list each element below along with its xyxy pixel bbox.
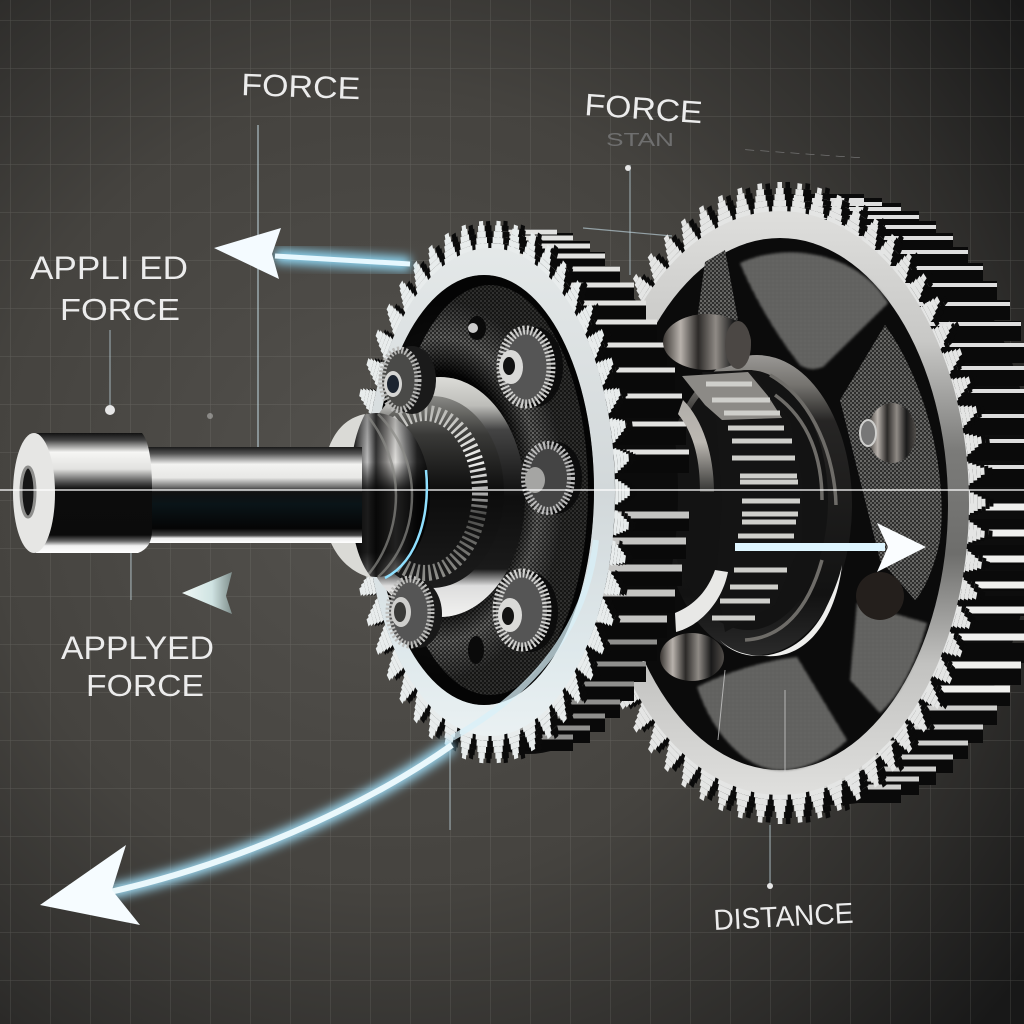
label: force top right: STAN bbox=[606, 130, 674, 150]
left plate bottom pin bbox=[468, 636, 484, 664]
left gear bolts bbox=[382, 327, 582, 652]
left gear silver ring bbox=[365, 248, 615, 736]
right gear silver ring bbox=[591, 211, 969, 795]
bolt upper right bbox=[499, 327, 563, 407]
rear hub concentric arcs bbox=[745, 375, 836, 640]
ring blue highlight bbox=[452, 540, 596, 738]
left gear extruded tooth bars bbox=[500, 232, 689, 741]
right hex bolt bbox=[860, 403, 916, 463]
pinion silver C band bbox=[678, 400, 714, 492]
central hub bbox=[322, 377, 525, 617]
left gear bbox=[351, 223, 689, 761]
right gear shadow teeth bbox=[584, 185, 992, 821]
input shaft bbox=[13, 433, 362, 553]
label: distance: DISTANCE bbox=[713, 898, 854, 937]
label: applied force upper: APPLI ED bbox=[30, 250, 188, 286]
bolt lower right bbox=[497, 572, 558, 652]
hub glow arc bbox=[385, 470, 427, 578]
pinion tooth highlights bbox=[706, 384, 800, 618]
right gear drips bbox=[718, 670, 785, 775]
pinion top silver wedge bbox=[682, 372, 782, 420]
label: force top right bbox=[584, 87, 704, 150]
guide line end dots bbox=[105, 165, 773, 889]
pinion teeth body bbox=[702, 370, 802, 632]
faint blurred caption: — — — — — — — — bbox=[745, 144, 860, 162]
rear hub disc bbox=[662, 355, 852, 655]
arrow: top left applied force bbox=[214, 228, 410, 279]
label: force top left: FORCE bbox=[241, 67, 361, 106]
arrow: right output bbox=[735, 523, 926, 572]
label: applied force lower: FORCE bbox=[86, 668, 204, 703]
narrow shaft bbox=[148, 447, 362, 543]
hub barrel shading bbox=[322, 413, 430, 577]
bolt lower left bbox=[389, 579, 442, 648]
hub large disc bbox=[355, 377, 525, 617]
label: applied force upper bbox=[30, 250, 188, 327]
right gear extruded tooth bars bbox=[780, 200, 1024, 793]
label: applied force upper: FORCE bbox=[60, 292, 180, 327]
right gear extruded tooth body bbox=[635, 201, 1024, 805]
arrow: small lower left bbox=[182, 572, 232, 614]
left gear plate shading bbox=[374, 275, 594, 705]
pinion and couplings bbox=[660, 314, 802, 681]
right spoke bbox=[840, 325, 942, 600]
hub flange bbox=[322, 414, 372, 578]
thin annotation guide lines bbox=[110, 125, 770, 885]
right gear inner dark bore bbox=[612, 238, 948, 770]
left gear dotted plate bbox=[392, 285, 588, 695]
label: force top right: FORCE bbox=[584, 87, 704, 130]
label: applied force lower bbox=[61, 630, 214, 703]
rear hub lower white crescent bbox=[720, 565, 842, 656]
hub barrel bbox=[322, 413, 430, 577]
upper left spoke sliver bbox=[695, 250, 738, 335]
left plate top pin bbox=[468, 316, 486, 340]
lower coupling bbox=[660, 633, 724, 681]
rear hub inner recess bbox=[668, 370, 828, 630]
hub spline teeth bbox=[370, 413, 480, 573]
lower dark bolt bbox=[856, 572, 904, 620]
right large gear bbox=[576, 185, 1024, 821]
bolt middle right bbox=[525, 442, 582, 514]
upper coupling bbox=[663, 314, 751, 370]
lower spoke bbox=[697, 657, 847, 770]
horizontal lens flare line bbox=[0, 488, 1024, 492]
upper spoke bbox=[740, 252, 888, 369]
shaft end face bbox=[13, 433, 55, 553]
right gear front teeth bbox=[576, 185, 984, 821]
left gear front teeth bbox=[351, 223, 629, 761]
label: applied force lower: APPLYED bbox=[61, 630, 214, 666]
pinion lower white teeth bbox=[675, 570, 728, 632]
left gear shadow teeth bbox=[358, 223, 636, 761]
bolt upper left bbox=[382, 346, 436, 414]
left gear extruded tooth body bbox=[378, 230, 678, 754]
lower right spoke bbox=[850, 603, 927, 713]
arrow: lower curved distance bbox=[40, 745, 452, 925]
right gear spokes bbox=[695, 250, 942, 770]
hub inner recess bbox=[360, 396, 504, 588]
shaft collar bbox=[36, 433, 152, 553]
shaft bore bbox=[21, 467, 35, 517]
left gear dark plate bbox=[374, 275, 594, 705]
hub barrel concentric arcs bbox=[366, 414, 412, 577]
